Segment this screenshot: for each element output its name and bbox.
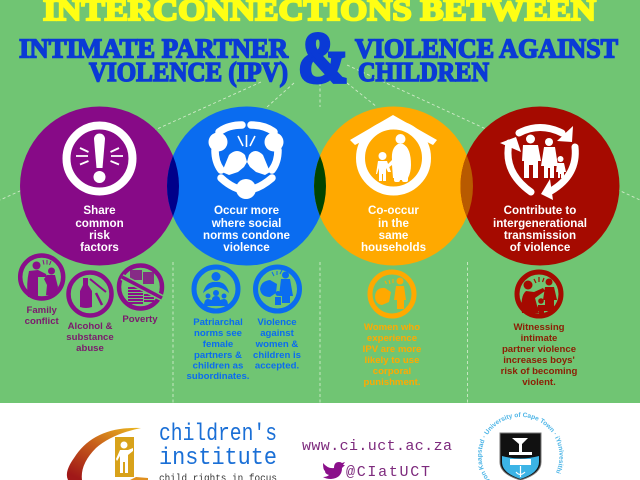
label: patriarchal norms: norms see <box>194 328 242 339</box>
label: alcohol and substance abuse: Alcohol & <box>68 321 112 332</box>
label: family conflict: Family <box>26 305 58 316</box>
caption: Co-occur <box>368 204 419 217</box>
website: www.ci.uct.ac.za <box>302 438 452 455</box>
heading: violence against children <box>355 34 618 87</box>
heading: intimate partner violence <box>19 34 288 87</box>
label: corporal punishment: corporal <box>373 366 411 377</box>
icon: alcohol and substance <box>68 272 112 316</box>
icon: exclamation <box>66 126 132 192</box>
label: patriarchal norms: Patriarchal <box>193 317 243 328</box>
label: family conflict: conflict <box>25 316 60 327</box>
caption: households <box>361 241 426 254</box>
icon: fists and community <box>208 125 284 199</box>
icon: patriarchal norms <box>194 267 238 311</box>
panel: intergenerational transmission <box>460 106 620 266</box>
label: poverty: Poverty <box>122 314 158 325</box>
label: patriarchal norms: partners & <box>194 350 242 361</box>
label: violence accepted: accepted. <box>255 360 299 372</box>
logo text: children's institute: institute <box>159 445 277 472</box>
heading: violence against children: VIOLENCE AGAINST <box>355 34 618 64</box>
label: witnessing violence: partner violence <box>502 344 576 355</box>
caption: same <box>379 229 409 242</box>
panel: share common risk factors <box>20 106 179 266</box>
caption: common <box>75 217 124 230</box>
icon: poverty <box>119 266 162 308</box>
label: corporal punishment: IPV are more <box>363 344 421 355</box>
icon: corporal punishment <box>370 272 414 316</box>
caption: Contribute to <box>504 204 576 217</box>
caption: in the <box>378 217 410 230</box>
label: corporal punishment: punishment. <box>363 377 421 388</box>
caption: where social <box>211 217 281 230</box>
label: violence accepted: Violence <box>257 317 297 328</box>
icon: twitter bird <box>323 462 345 479</box>
label: patriarchal norms: children as <box>193 360 243 372</box>
label: witnessing violence: violent. <box>522 377 556 388</box>
icon: witnessing violence <box>517 272 561 316</box>
label: corporal punishment: Women who <box>364 322 420 333</box>
heading: intimate partner violence: INTIMATE PARTNER <box>19 34 288 64</box>
label: witnessing violence: Witnessing <box>513 322 565 333</box>
heading: intimate partner violence: VIOLENCE (IPV) <box>89 57 288 87</box>
label: violence accepted: children is <box>253 350 301 361</box>
caption: of violence <box>510 241 571 254</box>
logo: children's institute crescent <box>67 428 148 480</box>
label: witnessing violence: intimate <box>521 333 557 344</box>
logo text: children's institute: children's <box>159 421 277 448</box>
heading: violence against children: CHILDREN <box>358 57 489 87</box>
caption: norms condone <box>203 229 291 242</box>
icon: family in cycle of arrows <box>500 126 575 200</box>
caption: factors <box>80 241 119 254</box>
caption: intergenerational <box>493 217 587 230</box>
icon: house with family <box>350 115 437 191</box>
caption: Share <box>83 204 116 217</box>
label: witnessing violence: increases boys' <box>503 355 575 366</box>
label: alcohol and substance abuse: abuse <box>76 343 104 354</box>
label: alcohol and substance abuse: substance <box>66 332 114 343</box>
label: corporal punishment: experience <box>367 333 417 344</box>
label: patriarchal norms: female <box>203 339 233 350</box>
panel: occur where norms condone violence <box>167 106 326 266</box>
label: witnessing violence: risk of becoming <box>501 366 578 377</box>
logo text: children's institute <box>159 421 277 480</box>
label: corporal punishment: likely to use <box>365 355 419 366</box>
footer band <box>0 403 640 480</box>
label: patriarchal norms: subordinates. <box>187 371 249 382</box>
caption: transmission <box>504 229 576 242</box>
caption: violence <box>223 241 270 254</box>
label: violence accepted: women & <box>255 339 298 350</box>
caption: Occur more <box>214 204 280 217</box>
panel: co-occur in same households <box>314 106 473 266</box>
caption: risk <box>89 229 110 242</box>
icon: violence accepted <box>256 267 300 311</box>
label: violence accepted: against <box>260 328 295 339</box>
icon: family conflict <box>20 256 63 298</box>
ampersand: & <box>298 18 348 98</box>
